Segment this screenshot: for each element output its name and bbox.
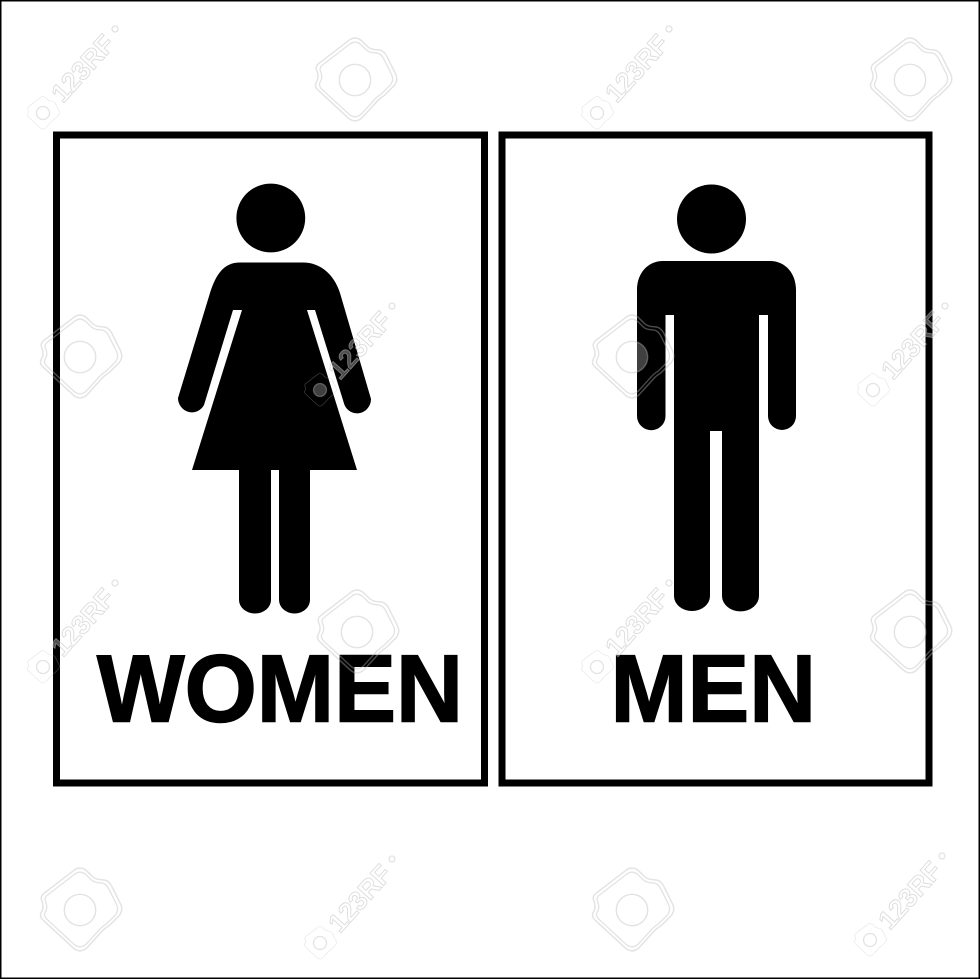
panel: men — [502, 135, 929, 783]
watermarks: 123RF — [322, 306, 398, 385]
watermarks: 123RF — [45, 29, 121, 108]
watermarks: 123RF — [872, 856, 948, 935]
icon: man figure — [637, 184, 796, 611]
heading: MEN: MEN — [610, 636, 816, 742]
watermarks: 123RF — [45, 583, 121, 662]
watermarks: 123RF — [599, 583, 675, 662]
watermarks: 123RF — [875, 306, 951, 385]
heading: WOMEN: WOMEN — [97, 636, 463, 742]
watermarks: 123RF — [322, 859, 398, 938]
watermarks: 123RF — [599, 29, 675, 108]
panel: women — [56, 135, 484, 783]
icon: woman figure — [178, 184, 371, 614]
